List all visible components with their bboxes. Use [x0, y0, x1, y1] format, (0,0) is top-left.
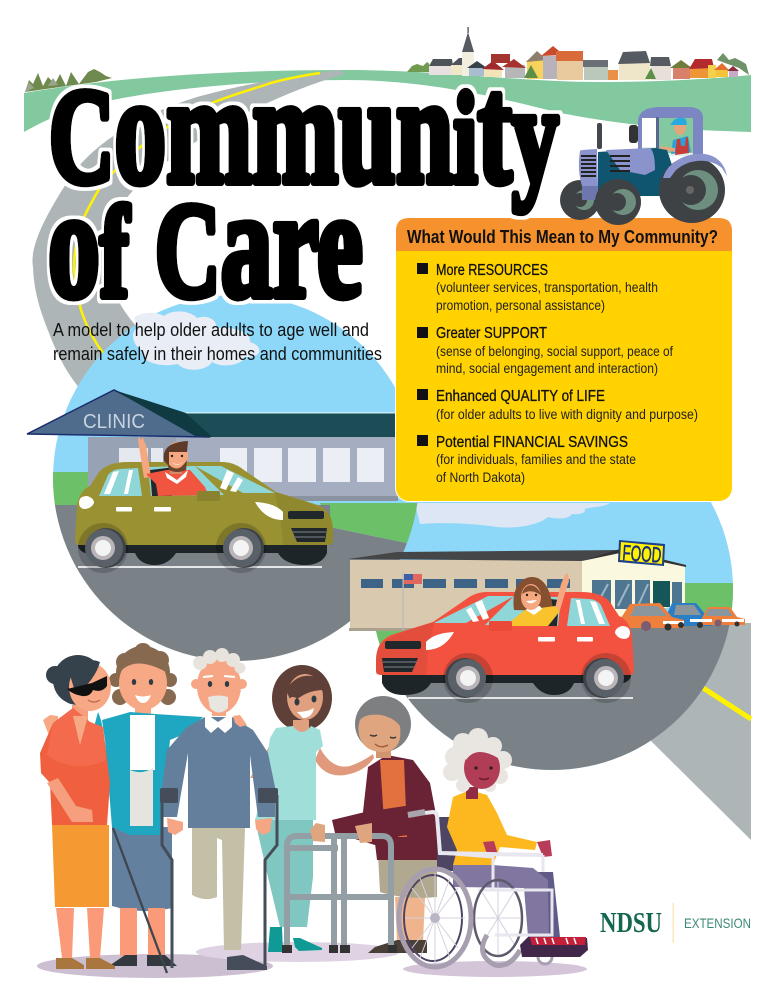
logo: NDSU Extension	[600, 903, 751, 943]
clinic building	[88, 412, 398, 501]
item: support: Greater SUPPORT	[436, 325, 547, 342]
crutches	[162, 795, 277, 968]
item: support	[417, 325, 673, 376]
road centre line	[74, 73, 320, 353]
item: support: (sense of belonging, social support, peace of	[436, 344, 673, 359]
scene circle: food store background	[376, 502, 733, 770]
item: quality of life	[417, 388, 698, 422]
subtitle	[53, 320, 382, 364]
mirror	[197, 491, 220, 501]
wheelchair	[399, 812, 552, 967]
logo: NDSU Extension: EXTENSION	[684, 915, 751, 931]
big rear wheel	[659, 157, 725, 223]
person: man with crutches	[160, 648, 278, 970]
mudguard	[663, 154, 727, 178]
light road lower right	[620, 623, 751, 840]
olive car with waving man	[75, 436, 333, 573]
road curve	[32, 70, 345, 390]
item: resources: (volunteer services, transportation, health	[436, 280, 658, 295]
cloud near food store	[415, 503, 610, 528]
cane	[113, 828, 167, 973]
person: nurse	[250, 665, 374, 952]
shoes	[520, 937, 588, 957]
item: financial savings: (for individuals, families and the state	[436, 452, 636, 467]
clinic roof with sign: CLINIC	[83, 411, 145, 433]
walker	[287, 836, 392, 947]
clinic roof with sign	[27, 390, 212, 437]
title line 2: of Care	[48, 157, 363, 330]
panel: what would this mean	[395, 217, 733, 502]
panel header	[396, 218, 732, 251]
rear small front wheel	[560, 180, 600, 220]
tractor	[560, 107, 727, 225]
cloud above clinic	[133, 311, 259, 370]
hood	[579, 123, 672, 200]
village	[407, 27, 749, 80]
man waving	[138, 436, 208, 496]
car body	[376, 592, 634, 703]
woman waving	[505, 573, 569, 626]
trees left	[25, 69, 112, 92]
item: quality of life: Enhanced QUALITY of LIFE	[436, 388, 605, 405]
parking lines	[78, 567, 633, 698]
title line 1: Community	[49, 46, 559, 216]
item: financial savings: of North Dakota)	[436, 470, 525, 485]
hands	[310, 823, 372, 843]
subtitle: A model to help older adults to age well and	[53, 320, 369, 340]
driver	[660, 118, 691, 155]
cab	[629, 107, 703, 165]
item: financial savings: Potential FINANCIAL SAVINGS	[436, 434, 628, 451]
mirror	[489, 621, 512, 631]
item: support: mind, social engagement and interaction)	[436, 361, 658, 376]
FOOD sign: FOOD	[622, 540, 662, 568]
person: woman in wheelchair	[399, 728, 588, 967]
person: woman in sunglasses with cane	[40, 655, 167, 973]
panel header: What Would This Mean to My Community?	[407, 227, 718, 247]
person: older woman with walker	[282, 696, 437, 953]
logo: NDSU Extension: NDSU	[600, 908, 662, 939]
flag	[402, 573, 422, 630]
green hill	[24, 70, 751, 132]
subtitle: remain safely in their homes and communities	[53, 344, 382, 364]
item: quality of life: (for older adults to live with dignity and purpose)	[436, 407, 698, 422]
FOOD sign	[618, 540, 665, 568]
item: resources: promotion, personal assistance)	[436, 298, 605, 313]
distant parked cars	[621, 603, 745, 631]
front wheel	[595, 179, 641, 225]
scene circle: clinic	[50, 290, 425, 670]
ground shadows	[37, 942, 587, 978]
person: woman in blue skirt with curly hair	[43, 643, 203, 966]
item: resources	[417, 262, 658, 313]
item: financial savings	[417, 434, 636, 485]
car body	[75, 462, 333, 573]
food store	[348, 540, 686, 631]
item: resources: More RESOURCES	[436, 262, 548, 279]
red car with waving woman	[376, 573, 634, 703]
